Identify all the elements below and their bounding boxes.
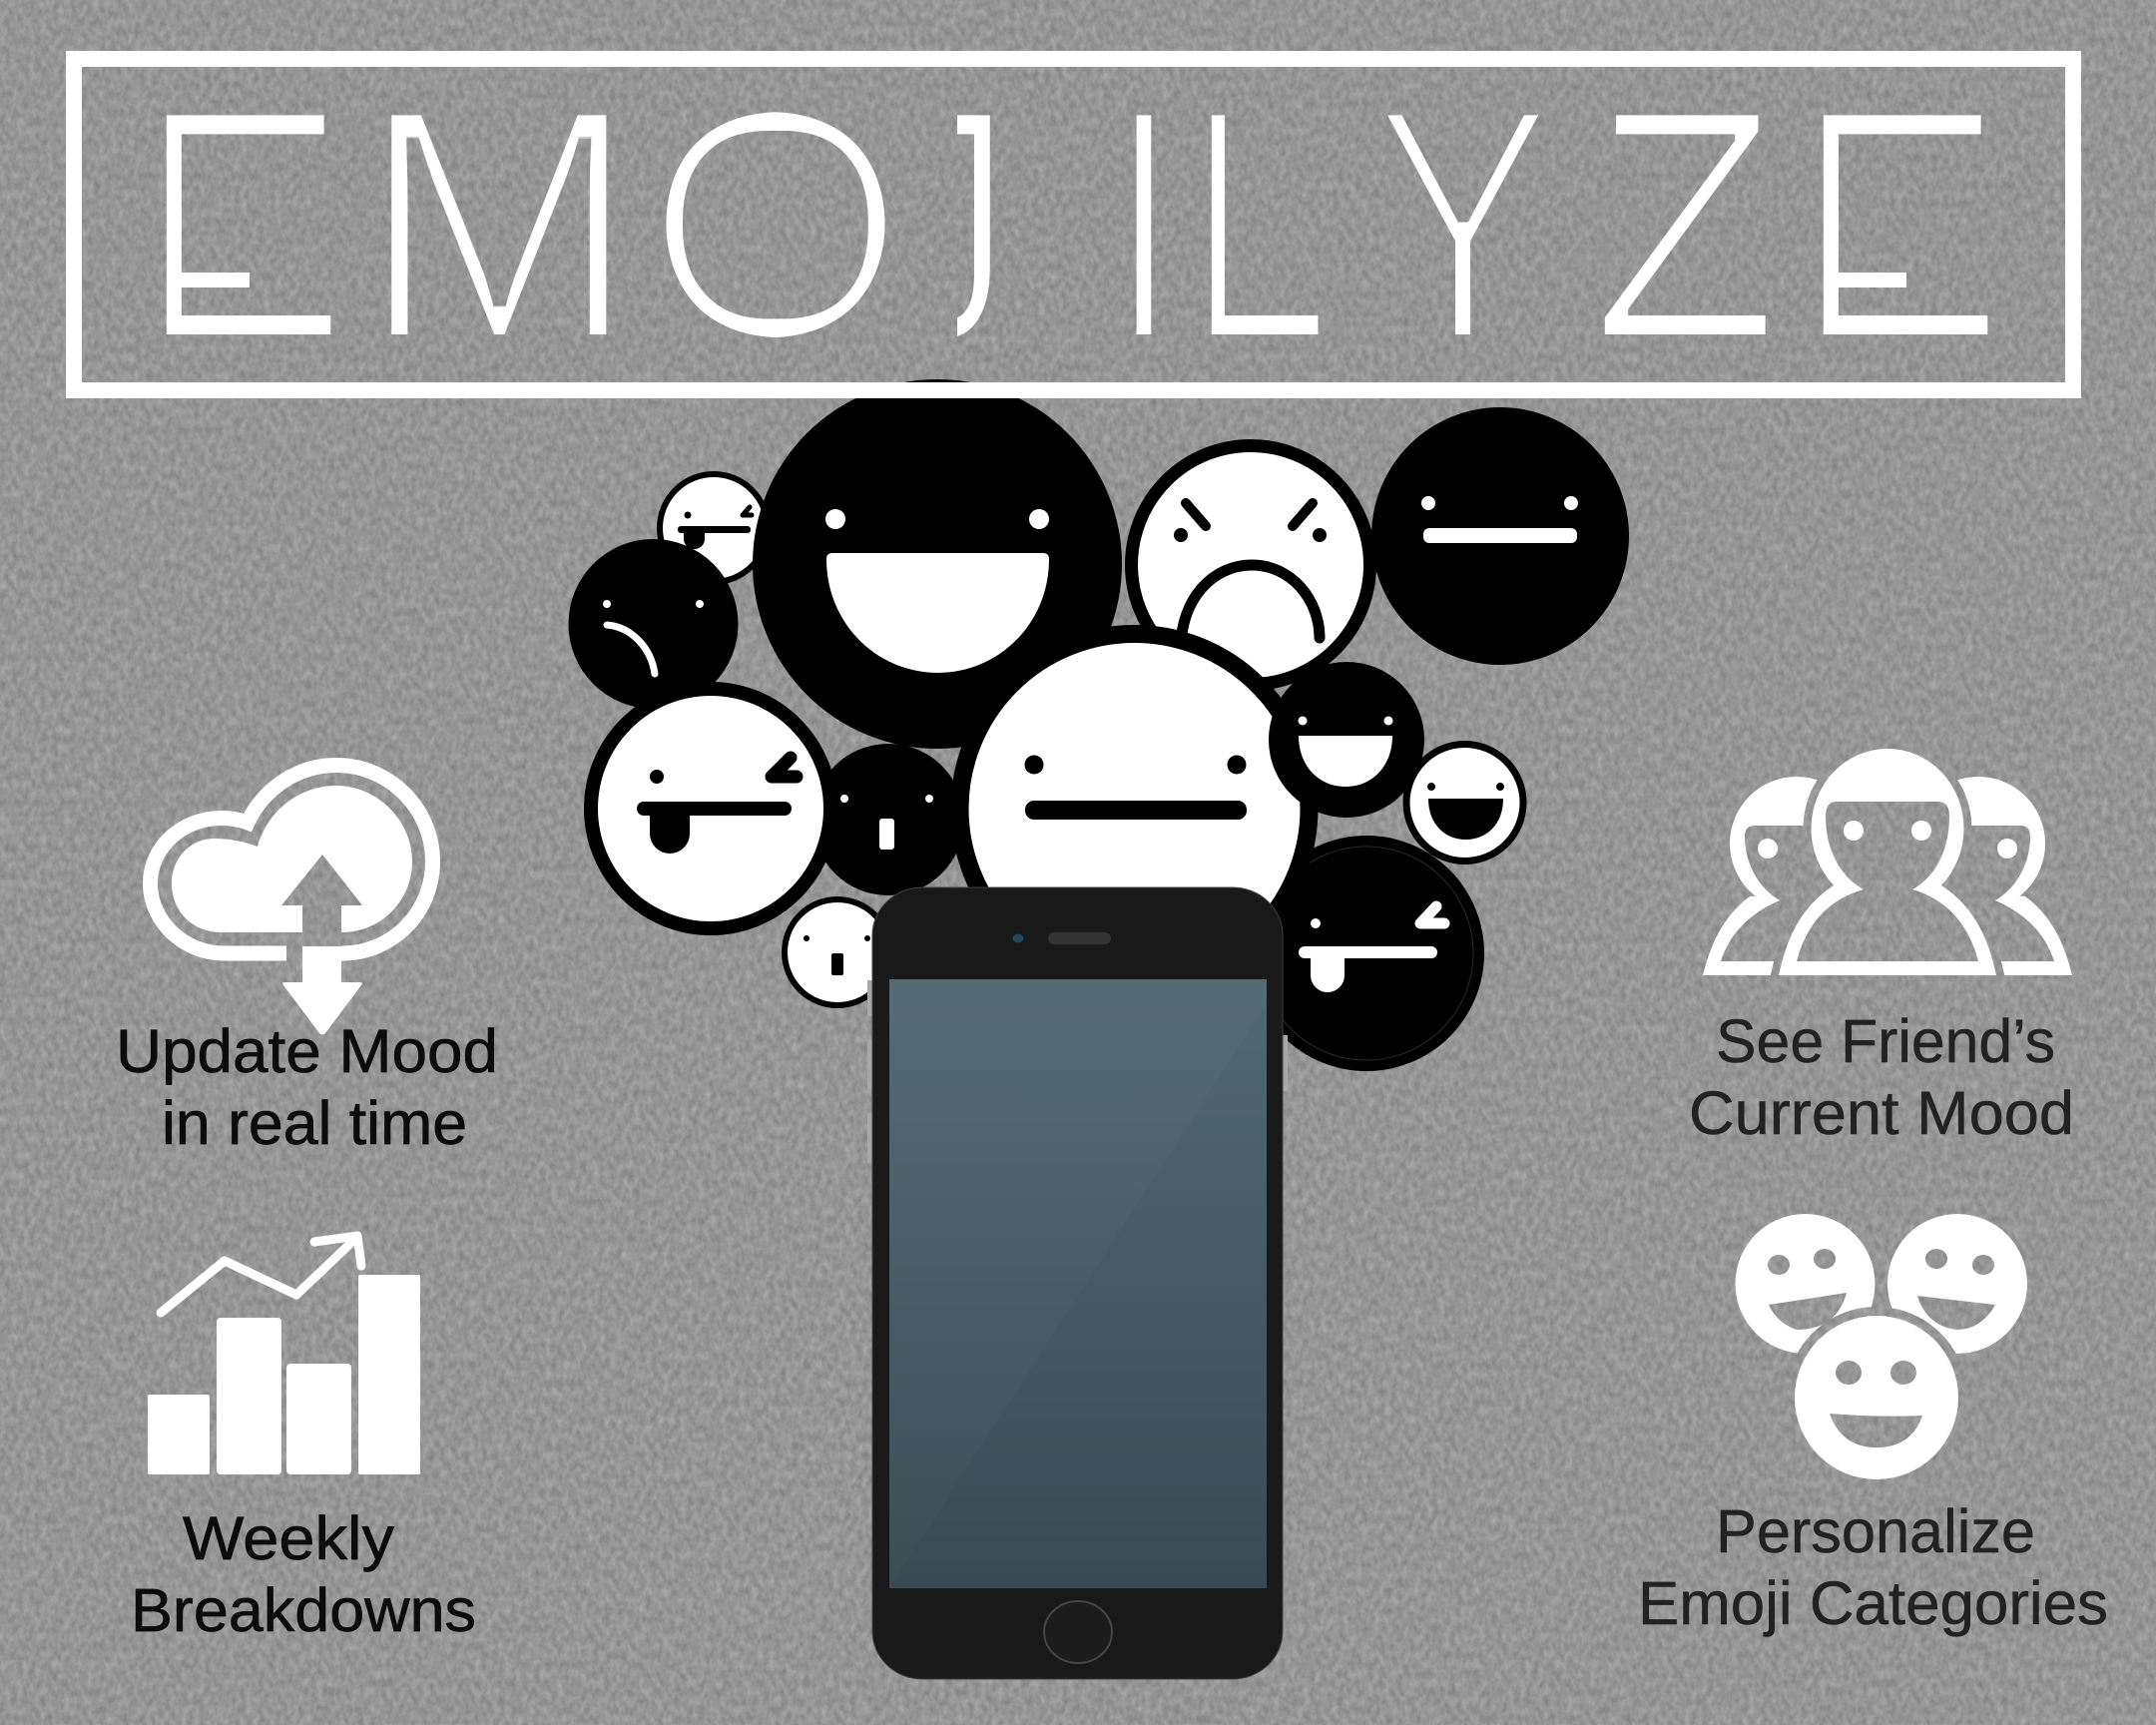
emoji: black neutral [1371,407,1629,665]
phone body [872,887,1283,1679]
title letter M: M [357,41,640,407]
emoji: small white wink [660,474,768,582]
emoji: large white neutral [960,634,1310,983]
label: update mood: in real time [162,1089,467,1157]
screen glare [889,979,1267,1588]
emoji: small black grin [1269,662,1424,818]
icon: download arrow [282,946,362,1034]
icon: cloud sync [143,758,440,1034]
title letter E [166,115,331,334]
phone screen [889,979,1267,1588]
emoji: white angry [1132,445,1369,685]
title letter O: O [642,42,909,407]
emoji cluster [569,379,1629,1071]
title letter Z: Z [1590,41,1780,407]
icon: three smiley faces [1735,1214,2027,1479]
title letter E (last) [1823,115,1988,334]
title letter I: I [1098,41,1190,407]
emoji: small white surprised [785,899,890,1005]
label: personalize emoji categories: Emoji Categories [1638,1569,2108,1637]
title frame [74,59,2073,390]
emoji: small black surprised [812,744,964,895]
phone [867,887,1288,1679]
label: weekly breakdowns: Breakdowns [131,1576,476,1644]
label: see friend's current mood: Current Mood [1689,1079,2074,1147]
icon: bar chart with trend arrow [148,1236,420,1474]
emoji: small black sad [569,539,739,709]
title letter E: E [132,42,353,407]
phone speaker [1048,932,1111,944]
phone side buttons [867,980,1288,1163]
title: EMOJILYZE [166,112,1988,337]
title letter J: J [901,42,1008,407]
label: weekly breakdowns: Weekly [183,1504,395,1572]
phone camera [1012,934,1024,942]
label: see friend's current mood: See Friend’s [1716,1007,2055,1075]
label: update mood: Update Mood [116,1017,498,1085]
emoji: black wink with tongue [1249,836,1484,1071]
title letter Y: Y [1373,41,1552,407]
emoji: large black grin [753,379,1122,749]
emoji: white wink with tongue [591,689,830,928]
label: personalize emoji categories: Personalize [1716,1497,2035,1565]
phone home button [1044,1601,1112,1663]
emoji: small white grin [1406,745,1523,861]
icon: three friends [1703,749,2072,975]
title letter E (last): E [1789,42,2010,407]
title letter L: L [1184,41,1333,407]
